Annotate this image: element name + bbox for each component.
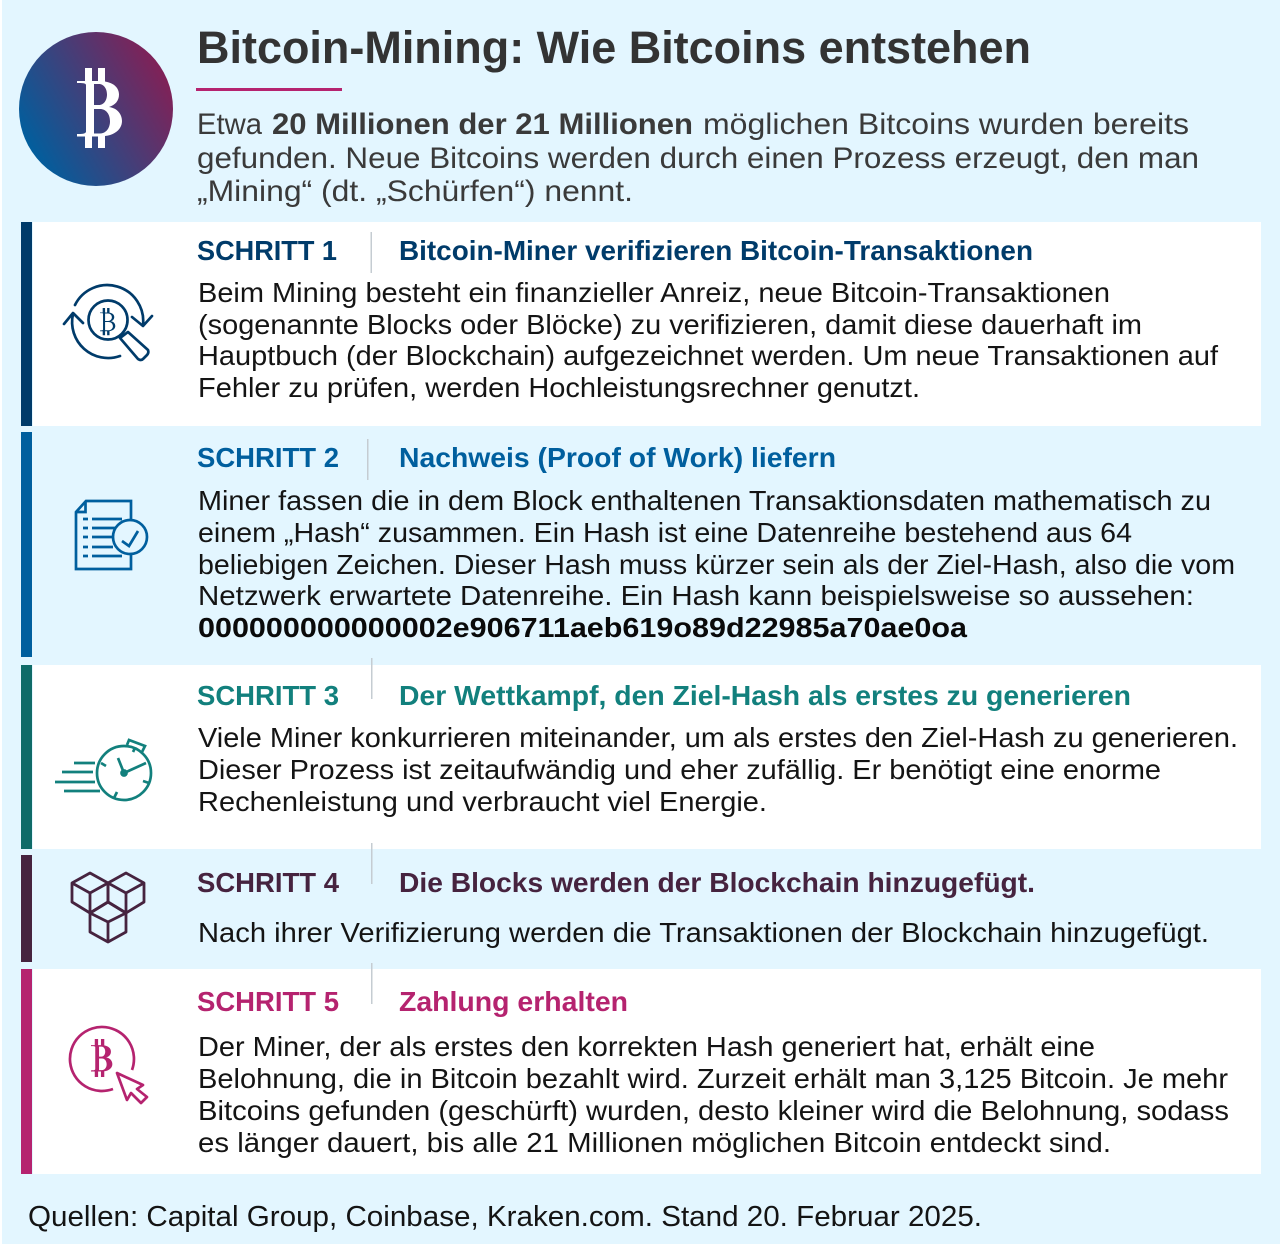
- step 1 heading: [197, 232, 1033, 273]
- source note: Quellen: Capital Group, Coinbase, Kraken.com. Stand 20. Februar 2025.: [28, 1201, 982, 1233]
- title underline: [196, 88, 342, 91]
- step 3 heading: Der Wettkampf, den Ziel-Hash als erstes zu generieren: [399, 680, 1131, 711]
- step 3 heading: [197, 658, 1131, 711]
- step 1 text: [198, 277, 1218, 403]
- step 5 text: es länger dauert, bis alle 21 Millionen möglichen Bitcoin entdeckt sind.: [198, 1127, 1111, 1158]
- step 2 text: Miner fassen die in dem Block enthaltenen Transaktionsdaten mathematisch zu: [198, 485, 1211, 516]
- step 2 text: beliebigen Zeichen. Dieser Hash muss kürzer sein als der Ziel-Hash, also die vom: [198, 549, 1235, 580]
- intro text: gefunden. Neue Bitcoins werden durch einen Prozess erzeugt, den man: [197, 142, 1199, 175]
- intro text: möglichen Bitcoins wurden bereits: [703, 108, 1189, 141]
- title: Bitcoin-Mining: Wie Bitcoins entstehen: [197, 22, 1031, 73]
- step 1 text: Fehler zu prüfen, werden Hochleistungsrechner genutzt.: [198, 372, 920, 403]
- step 4 heading: SCHRITT 4: [197, 867, 339, 898]
- icon: document check: [76, 501, 147, 569]
- icon: stopwatch: [55, 740, 151, 800]
- step 1 heading: Bitcoin-Miner verifizieren Bitcoin-Transaktionen: [399, 235, 1033, 266]
- step 1 heading: SCHRITT 1: [197, 235, 337, 266]
- step 1 text: Hauptbuch (der Blockchain) aufgezeichnet werden. Um neue Transaktionen auf: [198, 340, 1218, 371]
- step 3 text: [198, 722, 1238, 817]
- step 2 heading: [197, 439, 836, 480]
- icon: bitcoin verification: [64, 285, 152, 360]
- step 5 text: Belohnung, die in Bitcoin bezahlt wird. Zurzeit erhält man 3,125 Bitcoin. Je mehr: [198, 1063, 1228, 1094]
- intro text: 20 Millionen der 21 Millionen: [272, 108, 693, 141]
- step 3 text: Rechenleistung und verbraucht viel Energie.: [198, 786, 767, 817]
- panel: step 5: [21, 963, 1261, 1174]
- panel: step 3: [21, 658, 1261, 849]
- step 4 text: Nach ihrer Verifizierung werden die Transaktionen der Blockchain hinzugefügt.: [198, 917, 1209, 948]
- step 5 text: [198, 1031, 1229, 1158]
- intro text: „Mining“ (dt. „Schürfen“) nennt.: [197, 175, 633, 208]
- icon: bitcoin badge: [19, 32, 173, 186]
- step 2 text: [198, 485, 1235, 643]
- step 1 text: Beim Mining besteht ein finanzieller Anreiz, neue Bitcoin-Transaktionen: [198, 277, 1110, 308]
- icon: bitcoin cursor: [70, 1027, 147, 1103]
- step 2 heading: Nachweis (Proof of Work) liefern: [399, 442, 836, 473]
- step 4 heading: [197, 843, 1035, 898]
- step 4 heading: Die Blocks werden der Blockchain hinzugefügt.: [399, 867, 1035, 898]
- intro text: [197, 108, 1199, 208]
- step 2 text: einem „Hash“ zusammen. Ein Hash ist eine Datenreihe bestehend aus 64: [198, 517, 1132, 548]
- step 2 heading: SCHRITT 2: [197, 442, 339, 473]
- panel: step 2: [21, 432, 1235, 657]
- step 5 heading: SCHRITT 5: [197, 986, 339, 1017]
- step 5 heading: [197, 963, 628, 1017]
- icon: cubes: [72, 873, 144, 942]
- panel: step 4: [21, 843, 1209, 962]
- step 3 text: Dieser Prozess ist zeitaufwändig und eher zufällig. Er benötigt eine enorme: [198, 754, 1161, 785]
- step 5 text: Der Miner, der als erstes den korrekten Hash generiert hat, erhält eine: [198, 1031, 1095, 1062]
- step 2 text: 000000000000002e906711aeb619o89d22985a70ae0oa: [198, 612, 968, 643]
- intro text: Etwa: [197, 108, 262, 141]
- panel: step 1: [21, 222, 1261, 426]
- step 5 text: Bitcoins gefunden (geschürft) wurden, desto kleiner wird die Belohnung, sodass: [198, 1095, 1229, 1126]
- step 3 heading: SCHRITT 3: [197, 680, 339, 711]
- step 1 text: (sogenannte Blocks oder Blöcke) zu verifizieren, damit diese dauerhaft im: [198, 309, 1142, 340]
- step 3 text: Viele Miner konkurrieren miteinander, um als erstes den Ziel-Hash zu generieren.: [198, 722, 1238, 753]
- step 2 text: Netzwerk erwartete Datenreihe. Ein Hash kann beispielsweise so aussehen:: [198, 580, 1194, 611]
- step 5 heading: Zahlung erhalten: [399, 986, 628, 1017]
